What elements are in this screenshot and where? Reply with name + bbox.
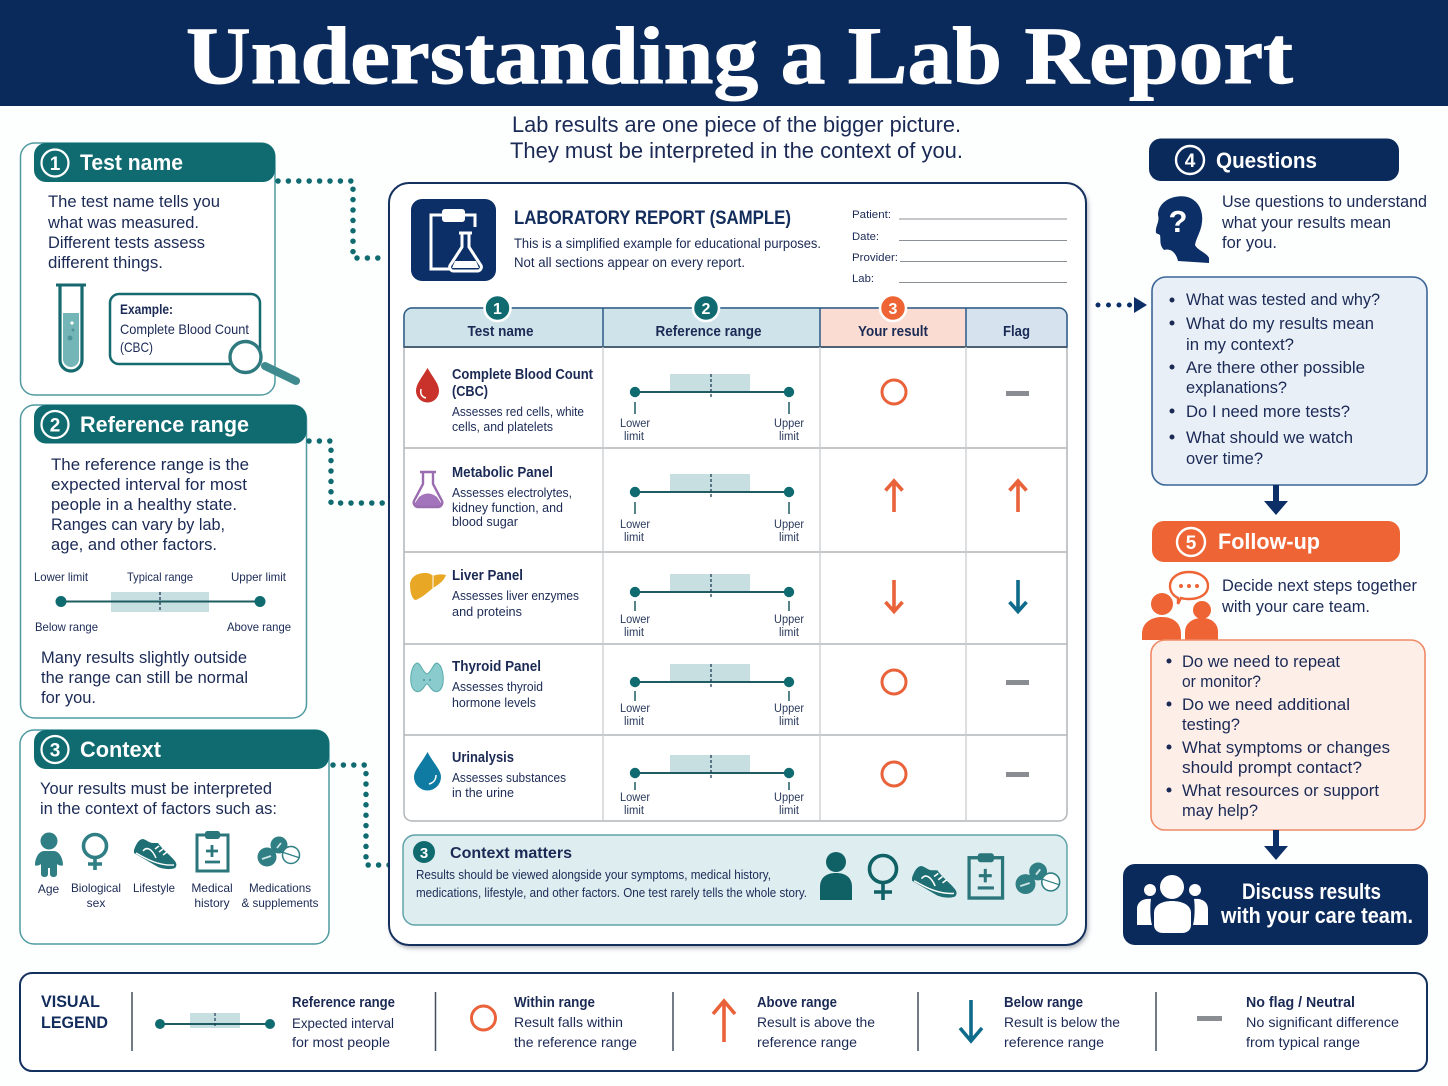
- row: liver panel: Liver Panel: [452, 568, 523, 584]
- text: questions intro: for you.: [1222, 233, 1277, 252]
- heading: report title: Not all sections appear on every report.: [514, 255, 745, 270]
- heading: reference range: [34, 405, 306, 444]
- table header: Test name: [468, 324, 534, 340]
- row: urinalysis: Assesses substances: [452, 770, 566, 785]
- heading: test name: Test name: [80, 150, 183, 175]
- row: urinalysis: limit: [624, 805, 645, 817]
- form fields: [852, 209, 1067, 285]
- row: complete blood count: cells, and platelets: [452, 419, 553, 434]
- heading: report title: LABORATORY REPORT (SAMPLE): [514, 208, 791, 229]
- text: questions intro: Use questions to understand: [1222, 192, 1427, 211]
- panel: follow-up list: What symptoms or changes: [1182, 738, 1390, 757]
- row: complete blood count: (CBC): [452, 384, 488, 400]
- panel: follow-up list: What resources or support: [1182, 781, 1379, 800]
- callout: context matters: Context matters: [450, 845, 572, 862]
- icon: head with question mark: ?: [1169, 204, 1187, 239]
- icon: thyroid: [411, 663, 443, 692]
- row: metabolic panel: Metabolic Panel: [452, 465, 553, 481]
- text: follow-up intro: [1221, 576, 1417, 616]
- panel: test name: [20, 143, 296, 395]
- arrow: follow-up to discussion: [1264, 830, 1288, 860]
- legend: reference range: for most people: [292, 1034, 390, 1050]
- table: results: [404, 295, 1067, 821]
- icon: medications: [242, 836, 318, 910]
- heading: context: Context: [80, 737, 162, 762]
- callout: discuss results: Discuss results: [1242, 879, 1381, 904]
- row: complete blood count: limit: [624, 431, 645, 443]
- heading: questions: 4: [1185, 151, 1196, 172]
- icon: medical history: history: [194, 896, 230, 910]
- icon: medications: & supplements: [242, 896, 318, 910]
- text: range note: for you.: [41, 688, 96, 707]
- chart: reference range diagram: Lower limit: [34, 570, 89, 584]
- row: thyroid panel: Lower: [620, 703, 650, 715]
- heading: questions: Questions: [1216, 148, 1317, 173]
- callout: discuss results: [1123, 864, 1428, 945]
- panel: follow-up list: or monitor?: [1182, 672, 1261, 691]
- text: reference range description: people in a healthy state.: [51, 495, 237, 514]
- row: urinalysis: Upper: [774, 792, 804, 804]
- icon: medications: Medications: [249, 881, 311, 895]
- row: metabolic panel: [414, 465, 1026, 544]
- icon: care team conversation: [1142, 572, 1218, 640]
- legend: below range: Result is below the: [1004, 1014, 1120, 1030]
- text: range note: [41, 648, 248, 707]
- icon: flask: [414, 472, 442, 507]
- panel: visual legend: [20, 973, 1427, 1071]
- icon: care team: [1137, 875, 1208, 933]
- connector: context to report: [333, 765, 400, 865]
- legend: within range: Within range: [514, 995, 595, 1011]
- panel: follow-up list: Do we need to repeat: [1182, 652, 1340, 671]
- icon: magnifier: [230, 342, 296, 381]
- table header: Your result: [858, 324, 928, 340]
- callout: context matters: 3: [420, 845, 428, 862]
- row: urinalysis: limit: [779, 805, 800, 817]
- text: context intro: Your results must be interpreted: [40, 779, 272, 798]
- text: range note: the range can still be normal: [41, 668, 248, 687]
- text: range note: Many results slightly outside: [41, 648, 247, 667]
- legend: below range: Below range: [1004, 995, 1083, 1011]
- icon: test tube: [56, 285, 86, 371]
- table header: [404, 295, 1067, 347]
- text: reference range description: [51, 455, 249, 554]
- icon: biological sex: Biological: [71, 881, 121, 895]
- legend: reference range: Expected interval: [292, 1015, 394, 1031]
- heading: context: [34, 730, 329, 769]
- table header: 2: [702, 301, 711, 318]
- legend: no flag: No significant difference: [1246, 1014, 1399, 1030]
- text: test name description: The test name tells you: [48, 192, 220, 211]
- subtitle: [510, 112, 963, 163]
- row: urinalysis: [414, 750, 1029, 817]
- text: reference range description: age, and other factors.: [51, 535, 217, 554]
- callout: context matters: Results should be viewed alongside your symptoms, medical history,: [416, 867, 771, 882]
- text: follow-up intro: Decide next steps together: [1222, 576, 1417, 595]
- callout: discuss results: with your care team.: [1220, 903, 1413, 928]
- chart: reference range diagram: Above range: [227, 620, 291, 634]
- connector: reference range to report: [309, 441, 388, 503]
- text: reference range description: The reference range is the: [51, 455, 249, 474]
- row: complete blood count: limit: [779, 431, 800, 443]
- heading: reference range: Reference range: [80, 412, 249, 437]
- legend: no flag: from typical range: [1246, 1034, 1360, 1050]
- row: thyroid panel: hormone levels: [452, 695, 536, 710]
- row: thyroid panel: Upper: [774, 703, 804, 715]
- legend: reference range: [155, 995, 395, 1050]
- table header: 1: [493, 301, 502, 318]
- text: test name description: different things.: [48, 253, 163, 272]
- row: metabolic panel: limit: [779, 532, 800, 544]
- heading: questions: [1149, 138, 1399, 181]
- panel: question list: What do my results mean: [1186, 314, 1374, 333]
- form fields: Lab:: [852, 273, 874, 285]
- legend: within range: the reference range: [514, 1034, 637, 1050]
- legend: within range: [472, 995, 637, 1050]
- text: context intro: in the context of factors such as:: [40, 799, 277, 818]
- text: context intro: [40, 779, 277, 818]
- panel: follow-up list: testing?: [1182, 715, 1240, 734]
- row: liver panel: Upper: [774, 614, 804, 626]
- heading: report title: This is a simplified example for educational purposes.: [514, 236, 821, 251]
- row: metabolic panel: Assesses electrolytes,: [452, 485, 572, 500]
- text: questions intro: [1221, 192, 1427, 252]
- panel: question list: What was tested and why?: [1186, 290, 1380, 309]
- table header: 3: [889, 301, 898, 318]
- panel: follow-up list: [1151, 640, 1425, 830]
- row: thyroid panel: Assesses thyroid: [452, 679, 543, 694]
- table header: Reference range: [656, 324, 762, 340]
- arrow: dotted link to questions: [1098, 297, 1147, 313]
- row: metabolic panel: limit: [624, 532, 645, 544]
- icon: urine drop: [414, 752, 441, 790]
- row: urinalysis: Lower: [620, 792, 650, 804]
- row: liver panel: [410, 568, 1026, 639]
- text: reference range description: Ranges can vary by lab,: [51, 515, 225, 534]
- panel: follow-up list: should prompt contact?: [1182, 758, 1362, 777]
- panel: context: [20, 730, 329, 944]
- heading: test name: 1: [50, 154, 61, 175]
- icons: context factors: [820, 852, 1060, 900]
- icon: biological sex: [71, 834, 121, 910]
- legend: above range: Result is above the: [757, 1014, 875, 1030]
- row: complete blood count: [416, 367, 1029, 443]
- heading: reference range: 2: [50, 416, 60, 436]
- heading: follow-up: [1152, 521, 1400, 562]
- chart: reference range diagram: Upper limit: [231, 570, 287, 584]
- legend: no flag: No flag / Neutral: [1246, 995, 1355, 1011]
- heading: test name: [34, 143, 275, 182]
- icon: age: Age: [38, 882, 59, 896]
- form fields: Date:: [852, 231, 879, 243]
- chart: reference range diagram: [34, 570, 291, 634]
- legend: below range: [960, 995, 1120, 1050]
- text: reference range description: expected interval for most: [51, 475, 247, 494]
- callout: example: [110, 294, 260, 364]
- panel: visual legend: VISUAL: [41, 992, 100, 1011]
- panel: follow-up list: Do we need additional: [1182, 695, 1350, 714]
- connector: test name to report: [278, 181, 388, 258]
- panel: laboratory report: [389, 183, 1088, 948]
- row: thyroid panel: [411, 659, 1029, 728]
- legend: no flag: [1197, 995, 1399, 1050]
- title banner: [0, 0, 1448, 106]
- subtitle: Lab results are one piece of the bigger picture.: [512, 112, 961, 137]
- heading: follow-up: Follow-up: [1218, 529, 1320, 554]
- row: complete blood count: Complete Blood Count: [452, 367, 593, 383]
- panel: follow-up list: may help?: [1182, 801, 1258, 820]
- panel: reference range: [20, 405, 306, 718]
- row: complete blood count: Lower: [620, 418, 650, 430]
- panel: question list: Do I need more tests?: [1186, 402, 1350, 421]
- icon: liver: [410, 573, 446, 600]
- text: test name description: Different tests assess: [48, 233, 205, 252]
- text: follow-up intro: with your care team.: [1221, 597, 1370, 616]
- row: thyroid panel: Thyroid Panel: [452, 659, 541, 675]
- heading: follow-up: 5: [1186, 533, 1197, 554]
- text: questions intro: what your results mean: [1221, 213, 1391, 232]
- text: test name description: [47, 192, 220, 272]
- icon: head with question mark: [1156, 196, 1209, 263]
- arrow: questions to follow-up: [1264, 485, 1288, 515]
- panel: question list: Are there other possible: [1186, 358, 1365, 377]
- icon: age: [35, 832, 63, 896]
- row: liver panel: and proteins: [452, 604, 522, 619]
- icon: lifestyle: [133, 839, 176, 895]
- callout: example: (CBC): [120, 339, 153, 355]
- legend: above range: Above range: [757, 995, 837, 1011]
- panel: question list: over time?: [1186, 449, 1263, 468]
- row: urinalysis: in the urine: [452, 785, 514, 800]
- row: liver panel: limit: [624, 627, 645, 639]
- callout: example: Complete Blood Count: [120, 321, 249, 337]
- row: thyroid panel: limit: [779, 716, 800, 728]
- heading: context: 3: [50, 740, 60, 762]
- legend: within range: Result falls within: [514, 1014, 623, 1030]
- row: liver panel: Assesses liver enzymes: [452, 588, 579, 603]
- table header: Flag: [1003, 324, 1030, 340]
- panel: question list: What should we watch: [1186, 428, 1353, 447]
- icon: medical history: Medical: [191, 881, 233, 895]
- legend: above range: reference range: [757, 1034, 857, 1050]
- heading: report title: [514, 208, 821, 270]
- callout: context matters: [403, 835, 1067, 925]
- title banner: Understanding a Lab Report: [186, 10, 1293, 101]
- row: complete blood count: Assesses red cells, white: [452, 404, 584, 419]
- panel: question list: [1152, 277, 1427, 485]
- panel: question list: explanations?: [1186, 378, 1287, 397]
- legend: below range: reference range: [1004, 1034, 1104, 1050]
- form fields: Patient:: [852, 209, 891, 221]
- row: metabolic panel: blood sugar: [452, 514, 519, 529]
- row: liver panel: Lower: [620, 614, 650, 626]
- row: thyroid panel: limit: [624, 716, 645, 728]
- icon: medical history: [191, 831, 233, 910]
- row: urinalysis: Urinalysis: [452, 750, 514, 766]
- legend: above range: [713, 995, 875, 1050]
- panel: question list: in my context?: [1186, 335, 1294, 354]
- chart: reference range diagram: Below range: [35, 620, 98, 634]
- row: complete blood count: Upper: [774, 418, 804, 430]
- icon: clipboard and flask: [411, 199, 496, 281]
- row: metabolic panel: Upper: [774, 519, 804, 531]
- icon: lifestyle: Lifestyle: [133, 881, 175, 895]
- form fields: Provider:: [852, 252, 898, 264]
- callout: context matters: medications, lifestyle, and other factors. One test rarely tells the whole story.: [416, 885, 807, 900]
- subtitle: They must be interpreted in the context of you.: [510, 138, 963, 163]
- chart: reference range diagram: Typical range: [127, 570, 193, 584]
- row: liver panel: limit: [779, 627, 800, 639]
- legend: reference range: Reference range: [292, 995, 395, 1011]
- callout: example: Example:: [120, 301, 173, 317]
- icon: blood drop: [416, 368, 439, 402]
- row: metabolic panel: Lower: [620, 519, 650, 531]
- icon: biological sex: sex: [87, 896, 105, 910]
- panel: visual legend: LEGEND: [41, 1013, 108, 1032]
- row: metabolic panel: kidney function, and: [452, 500, 563, 515]
- text: test name description: what was measured.: [47, 213, 199, 232]
